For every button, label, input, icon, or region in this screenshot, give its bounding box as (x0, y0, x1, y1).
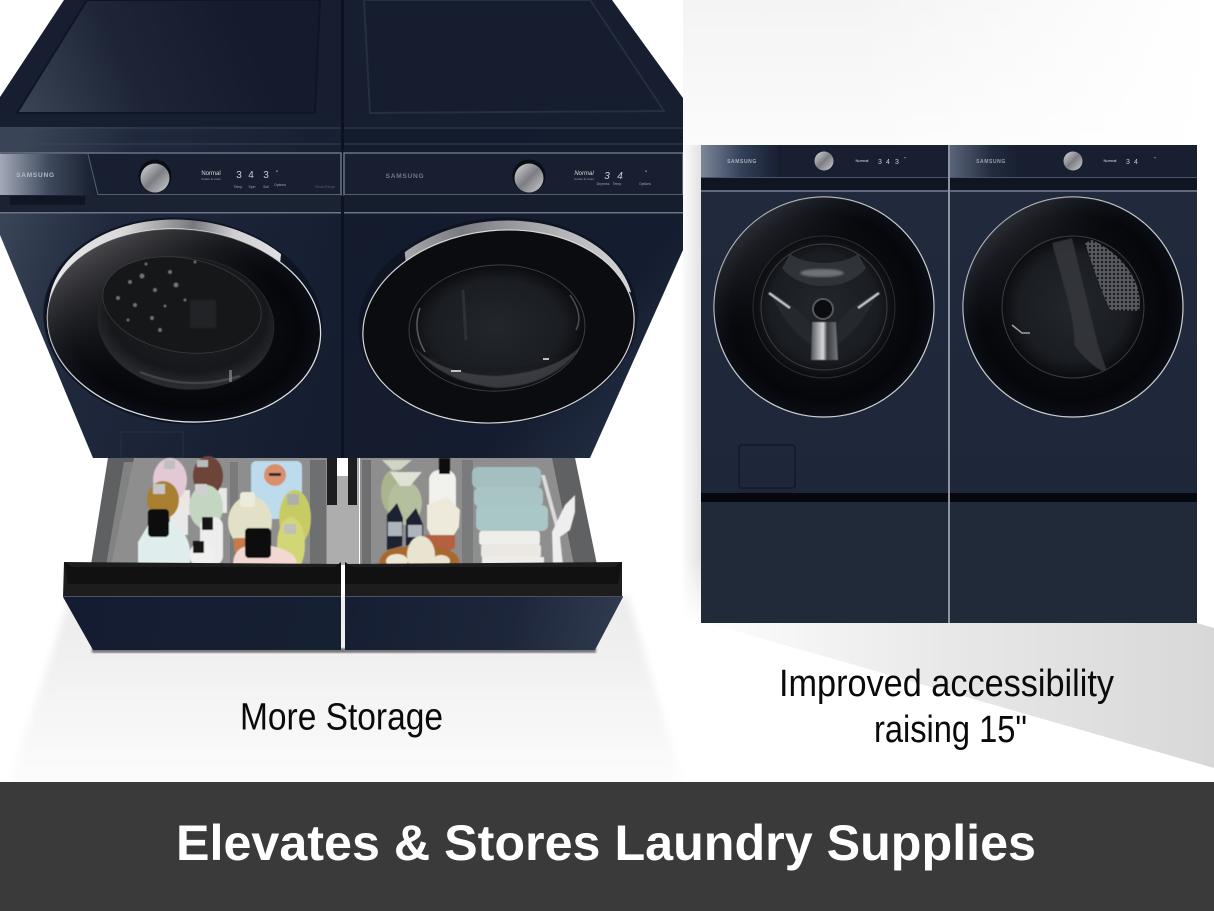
control panel: 3 (895, 159, 899, 166)
label: more storage: More Storage (240, 696, 443, 738)
control panel: washer: Options (274, 183, 286, 187)
control panel: washer: SmartThings (315, 185, 335, 189)
drawer interior: right (360, 458, 597, 565)
control panel: SAMSUNG (976, 159, 1006, 165)
panel: improved accessibility (683, 0, 1214, 768)
control panel: dryer: Temp (613, 182, 621, 186)
drawer front: right (345, 562, 623, 650)
control panel: dryer: Dryness (597, 182, 610, 186)
floor shadow (9, 597, 683, 784)
control panel: dryer: 4 (617, 171, 623, 182)
washer glass (92, 245, 280, 398)
door (963, 197, 1183, 417)
knob (138, 160, 172, 192)
dryer glass (406, 260, 588, 396)
control panel: 3 (1126, 159, 1130, 166)
control panel: dryer (344, 153, 683, 214)
control panel: " (1154, 157, 1156, 163)
control panel: washer: SAMSUNG (16, 172, 55, 179)
control panel: " (904, 157, 906, 163)
control panel: Normal (856, 158, 869, 163)
lint filter mesh (1085, 240, 1140, 311)
panel: more storage (0, 0, 683, 784)
label: improved accessibility: raising 15" (874, 709, 1027, 751)
washer and dryer in perspective (0, 0, 683, 653)
door (714, 197, 934, 417)
control panel: washer: Temp (234, 185, 242, 189)
control panel: SAMSUNG (727, 159, 757, 165)
control panel: 3 (878, 159, 882, 166)
control panel: dryer: Cotton & Linen (574, 177, 594, 181)
drawer center gap (327, 458, 359, 565)
control panel: Normal (1104, 158, 1117, 163)
control panel: dryer: SAMSUNG (386, 173, 424, 180)
bottles: left drawer (138, 456, 311, 573)
control panel: washer: Spin (248, 185, 256, 189)
label: improved accessibility (779, 663, 1114, 751)
pedestal (701, 493, 948, 623)
control panel (701, 145, 948, 190)
dryer on pedestal (950, 145, 1197, 623)
control panel: 4 (1134, 159, 1138, 166)
control panel (950, 145, 1197, 190)
drawer interior: left (91, 458, 341, 565)
control panel: washer: Normal (201, 171, 221, 177)
control panel: washer: 3 (263, 170, 269, 181)
bottom banner (0, 782, 1214, 911)
knob (512, 160, 546, 192)
control panel: dryer: " (645, 171, 647, 177)
drawer shadow (92, 648, 596, 653)
machine tops (0, 0, 683, 135)
control panel: washer: 4 (248, 170, 254, 181)
control panel: dryer: Options (639, 182, 651, 186)
drawer front: left (63, 562, 341, 650)
seam between machines (948, 145, 950, 623)
body (701, 190, 948, 493)
washer on pedestal (701, 145, 948, 623)
machine bodies (0, 127, 342, 458)
pedestal (950, 493, 1197, 623)
control panel: washer: 3 (236, 170, 242, 181)
control panel: 4 (886, 159, 890, 166)
control panel: washer: Soil (263, 185, 269, 189)
control panel: dryer: Normal (574, 171, 594, 177)
control panel: washer: Cotton & Linen (201, 177, 221, 181)
banner headline: Elevates & Stores Laundry Supplies (176, 815, 1036, 871)
washer door (43, 218, 322, 424)
dryer door (358, 218, 638, 424)
wall (683, 0, 1214, 623)
bottles and towels: right drawer (379, 458, 575, 574)
open storage drawers (63, 456, 623, 653)
control panel: washer (0, 153, 341, 214)
label: improved accessibility: Improved accessibility (779, 663, 1114, 705)
body (950, 190, 1197, 493)
floor reflection (708, 623, 1214, 768)
control panel: dryer: 3 (604, 171, 610, 182)
control panel: washer: " (276, 171, 278, 177)
